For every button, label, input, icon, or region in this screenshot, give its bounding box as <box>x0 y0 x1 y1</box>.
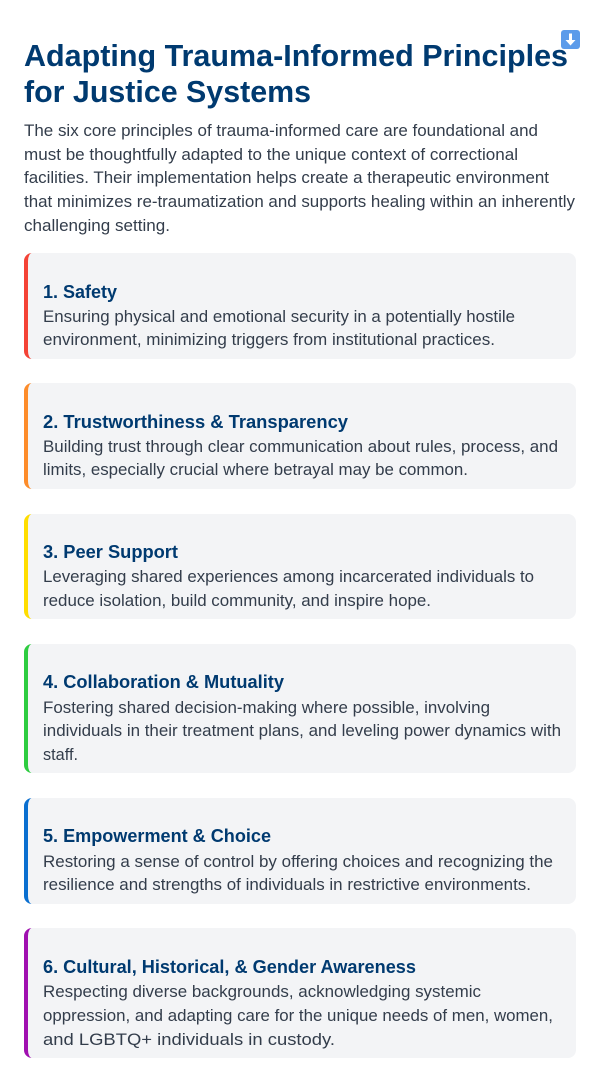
heading: Safety: 1. Safety <box>43 281 118 302</box>
text: Peer Support description: Leveraging shared experiences among incarcerated individuals to <box>43 567 534 586</box>
text: Peer Support description: reduce isolation, build community, and inspire hope. <box>43 591 431 610</box>
intro text: that minimizes re-traumatization and supports healing within an inherently <box>24 192 576 211</box>
panel: 6. Cultural, Historical, & Gender Awareness <box>24 928 576 1058</box>
heading: Trustworthiness: 2. Trustworthiness & Transparency <box>43 411 349 432</box>
panel: 1. Safety <box>24 253 576 359</box>
heading: Peer Support: 3. Peer Support <box>43 541 178 562</box>
panel: 5. Empowerment & Choice <box>24 798 576 904</box>
text: Cultural Awareness description: and LGBTQ+ individuals in custody. <box>43 1030 335 1049</box>
text: Peer Support description <box>43 567 534 610</box>
text: Trustworthiness description <box>43 437 558 479</box>
text: Empowerment description <box>43 852 553 894</box>
text: Safety description <box>43 307 515 349</box>
heading: Collaboration: 4. Collaboration & Mutuality <box>43 671 285 692</box>
panel: 3. Peer Support <box>24 514 576 619</box>
heading: Cultural Awareness: 6. Cultural, Historical, & Gender Awareness <box>43 956 416 977</box>
text: Safety description: environment, minimizing triggers from institutional practices. <box>43 330 495 349</box>
text: Collaboration description: Fostering shared decision-making where possible, involving <box>43 698 490 717</box>
title: for Justice Systems <box>24 74 311 109</box>
text: Cultural Awareness description: Respecting diverse backgrounds, acknowledging systemic <box>43 982 481 1001</box>
intro text: must be thoughtfully adapted to the unique context of correctional <box>24 145 518 164</box>
text: Cultural Awareness description <box>43 982 553 1049</box>
text: Collaboration description: individuals in their treatment plans, and leveling power dynamics with <box>43 721 561 740</box>
text: Safety description: Ensuring physical and emotional security in a potentially hostile <box>43 307 515 326</box>
icon: download arrow <box>561 30 580 49</box>
text: Trustworthiness description: Building trust through clear communication about rules, process, and <box>43 437 558 456</box>
panel: 2. Trustworthiness & Transparency <box>24 383 576 489</box>
title <box>24 38 568 109</box>
text: Empowerment description: resilience and strengths of individuals in restrictive environments. <box>43 875 531 894</box>
intro text: facilities. Their implementation helps create a therapeutic environment <box>24 168 549 187</box>
intro text: challenging setting. <box>24 216 170 235</box>
intro text <box>24 121 576 235</box>
text: Cultural Awareness description: oppression, and adapting care for the unique needs of men, women, <box>43 1006 553 1025</box>
title: Adapting Trauma-Informed Principles <box>24 38 568 73</box>
text: Collaboration description <box>43 698 561 764</box>
text: Empowerment description: Restoring a sense of control by offering choices and recognizing the <box>43 852 553 871</box>
text: Trustworthiness description: limits, especially crucial where betrayal may be common. <box>43 460 468 479</box>
panel: 4. Collaboration & Mutuality <box>24 644 576 773</box>
intro text: The six core principles of trauma-informed care are foundational and <box>24 121 538 140</box>
text: Collaboration description: staff. <box>43 745 78 764</box>
heading: Empowerment: 5. Empowerment & Choice <box>43 825 271 846</box>
